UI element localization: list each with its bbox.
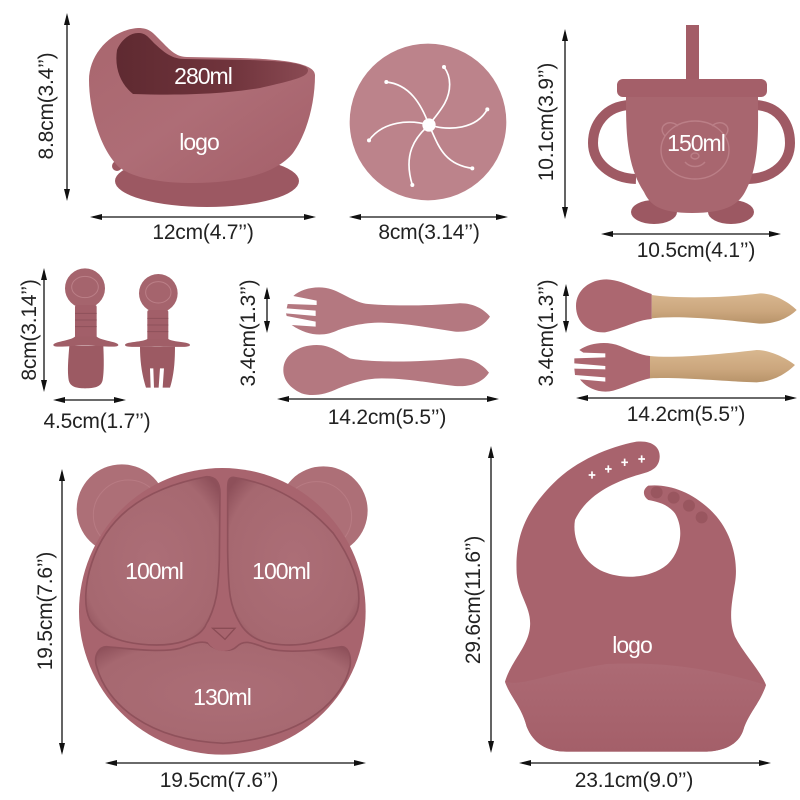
short fork	[125, 274, 190, 388]
cup lid	[617, 79, 767, 97]
handles	[593, 105, 790, 179]
dimension: short cutlery width: 4.5cm(1.7’’)	[44, 410, 150, 433]
dimension: cup height	[535, 29, 568, 219]
dimension: bowl height: 8.8cm(3.4’’)	[35, 53, 58, 159]
dimension: wooden set height: 3.4cm(1.3’’)	[535, 280, 558, 386]
dimension: short cutlery width	[44, 397, 150, 433]
dimension: silicone set height	[237, 280, 270, 386]
snap buttons	[651, 486, 708, 523]
straw	[686, 25, 699, 81]
dimension: wooden set height	[535, 280, 569, 386]
ear rings	[93, 480, 352, 552]
bowl body	[89, 28, 315, 183]
dimension: plate width	[105, 760, 366, 792]
fork head	[574, 343, 650, 392]
bib body	[505, 441, 766, 752]
dimension: silicone set width	[277, 396, 499, 429]
logo label: logo	[612, 632, 652, 658]
left well	[86, 477, 220, 645]
ears	[77, 464, 368, 555]
dimension: bib width	[519, 760, 771, 792]
nose	[205, 614, 242, 651]
bear face emboss	[661, 121, 729, 179]
star slits	[369, 67, 487, 185]
left capacity label: 100ml	[125, 558, 183, 584]
panel: suction bowl	[89, 28, 315, 207]
short spoon	[53, 268, 118, 388]
right capacity label: 100ml	[252, 558, 310, 584]
lid disc	[350, 44, 506, 200]
dimension: cup width: 10.5cm(4.1’’)	[637, 239, 755, 262]
feet	[631, 200, 754, 224]
cup body	[626, 96, 758, 213]
centre hole and slit ends	[367, 65, 489, 187]
dimension: plate width: 19.5cm(7.6’’)	[160, 769, 278, 792]
dimension: cup height: 10.1cm(3.9’’)	[535, 63, 558, 181]
logo label: logo	[179, 129, 219, 155]
dimension: wooden set width	[576, 395, 797, 426]
dimension: bib height: 29.6cm(11.6’’)	[462, 536, 485, 664]
capacity label: 280ml	[174, 63, 232, 89]
dimension: lid width	[349, 214, 508, 244]
snap holes	[589, 455, 645, 479]
capacity label: 150ml	[667, 130, 725, 156]
plate body	[79, 468, 366, 755]
wooden handles	[650, 293, 797, 382]
dimension: silicone set height: 3.4cm(1.3’’)	[237, 280, 260, 386]
right well	[228, 477, 359, 645]
suction base	[112, 155, 299, 207]
spoon head	[576, 279, 652, 332]
panel: bear plate	[77, 464, 368, 755]
dimension: short cutlery height	[18, 268, 47, 392]
dimension: short cutlery height: 8cm(3.14’’)	[18, 279, 41, 381]
dimension: cup width	[601, 231, 781, 262]
panel: sippy cup	[593, 25, 790, 224]
silicone spoon	[283, 345, 489, 395]
dimension: lid width: 8cm(3.14’’)	[378, 221, 480, 244]
dimension: silicone set width: 14.2cm(5.5’’)	[328, 406, 446, 429]
panel: silicone bib	[505, 441, 766, 752]
dimension: bowl height	[35, 13, 70, 201]
dimension: wooden set width: 14.2cm(5.5’’)	[627, 403, 745, 426]
panel: snack lid	[350, 44, 506, 200]
panel: wooden spoon and fork	[574, 279, 797, 392]
pocket	[505, 663, 766, 752]
dimension: bowl width: 12cm(4.7’’)	[152, 221, 254, 244]
bowl interior	[116, 33, 308, 95]
silicone fork	[286, 287, 490, 334]
dimension: plate height	[34, 469, 65, 755]
dimension: bib width: 23.1cm(9.0’’)	[575, 769, 693, 792]
panel: silicone fork and spoon	[283, 287, 490, 395]
bottom well	[96, 642, 350, 743]
bottom capacity label: 130ml	[193, 684, 251, 710]
dimension: plate height: 19.5cm(7.6’’)	[34, 552, 57, 670]
dimension: bib height	[462, 446, 494, 753]
dimension: bowl width	[90, 214, 316, 244]
panel: short spoon and fork	[53, 268, 190, 388]
